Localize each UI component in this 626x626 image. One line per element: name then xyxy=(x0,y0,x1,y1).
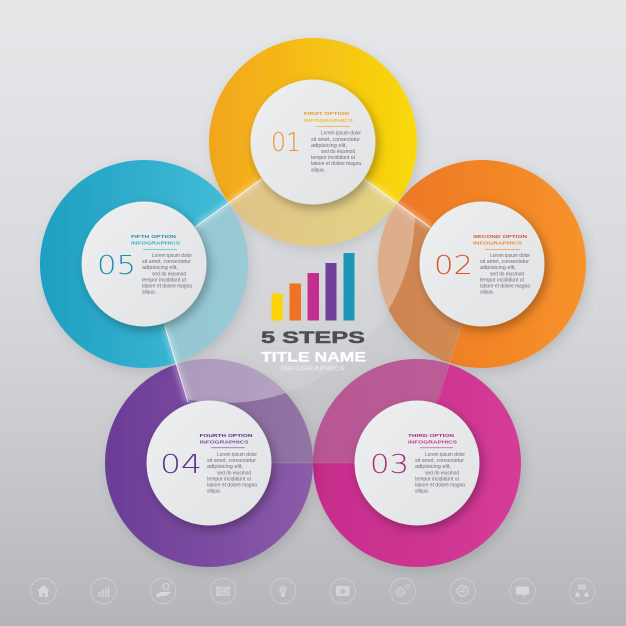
text block: second option: INFOGRAPHICS xyxy=(473,240,522,246)
text block: fourth option: 04 xyxy=(160,450,202,480)
inner disc: second option xyxy=(420,202,544,326)
glowing edge lines xyxy=(165,179,461,463)
inner disc: third option xyxy=(354,400,480,526)
icon: hand with coin xyxy=(150,578,176,604)
text block: second option: 02 xyxy=(434,251,473,281)
text block: third option: adipisicing elit, xyxy=(415,464,451,470)
text block: fourth option: adipisicing elit, xyxy=(207,464,243,470)
center title: TITLE NAME xyxy=(261,350,366,364)
text block: fourth option: INFOGRAPHICS xyxy=(200,439,248,444)
text block: third option: sed do eiusmod xyxy=(425,470,459,476)
icon: network xyxy=(569,578,595,604)
icon: clock xyxy=(450,578,476,604)
inner disc: fourth option xyxy=(146,400,272,526)
center title xyxy=(261,328,366,372)
icon: home xyxy=(31,578,56,604)
text block: second option: sed do eiusmod xyxy=(490,271,524,277)
text block: fifth option: FIFTH OPTION xyxy=(131,234,177,239)
ring: fourth option xyxy=(105,359,313,567)
text block: third option: tempor incididunt ut xyxy=(415,476,460,482)
text block: first option: adipisicing elit, xyxy=(311,143,347,149)
text block: first option: sit amet, consectetur xyxy=(311,137,360,143)
text block: fifth option: adipisicing elit, xyxy=(142,265,178,271)
text block: third option: THIRD OPTION xyxy=(408,433,455,438)
text block: first option: INFOGRAPHICS xyxy=(304,118,353,123)
text block: first option: labore et dolore magna xyxy=(311,161,361,167)
text block: first option: sed do eiusmod xyxy=(321,149,355,155)
ring: third option xyxy=(313,359,521,567)
icon: speech bubble xyxy=(510,578,535,604)
text block: second option: Lorem ipsum dolor xyxy=(490,253,530,259)
text block: first option xyxy=(271,111,361,173)
text block: first option: tempor incididunt ut xyxy=(311,155,356,161)
text block: third option: aliqua. xyxy=(415,489,429,495)
text block: fourth option: aliqua. xyxy=(207,489,221,495)
inner disc: first option xyxy=(250,80,376,204)
text block: fourth option: tempor incididunt ut xyxy=(207,476,252,482)
center title: 5 STEPS xyxy=(261,328,365,347)
icon: gears xyxy=(390,578,416,604)
text block: third option: 03 xyxy=(370,450,409,480)
text block: fifth option: sit amet, consectetur xyxy=(142,259,191,265)
text block: second option: SECOND OPTION xyxy=(473,234,528,239)
icon: light bulb xyxy=(270,578,296,604)
text block: first option: Lorem ipsum dolor xyxy=(321,131,361,137)
text block: third option: Lorem ipsum dolor xyxy=(425,452,465,458)
icon: chart xyxy=(91,578,116,604)
glass pentagon overlay xyxy=(164,178,462,463)
inner disc: fifth option xyxy=(82,202,206,326)
text block: first option: FIRST OPTION xyxy=(304,111,350,116)
text block: second option xyxy=(434,234,530,296)
text block: third option: sit amet, consectetur xyxy=(415,458,464,464)
icon: envelope xyxy=(210,578,236,604)
icon: camera xyxy=(330,578,356,604)
ring: fifth option xyxy=(40,160,248,368)
text block: second option: aliqua. xyxy=(480,290,494,296)
text block: fifth option: INFOGRAPHICS xyxy=(131,240,180,246)
text block: fifth option: aliqua. xyxy=(142,290,156,296)
text block: third option xyxy=(370,433,465,495)
text block: fourth option: sit amet, consectetur xyxy=(207,458,256,464)
text block: first option: 01 xyxy=(271,128,301,158)
text block: fourth option: Lorem ipsum dolor xyxy=(217,452,257,458)
text block: third option: INFOGRAPHICS xyxy=(408,439,457,444)
ring: first option xyxy=(209,38,417,246)
text block: fifth option: labore et dolore magna xyxy=(142,284,192,290)
text block: fifth option: 05 xyxy=(97,251,136,281)
text block: second option: sit amet, consectetur xyxy=(480,259,529,265)
text block: fourth option: FOURTH OPTION xyxy=(200,433,253,438)
text block: second option: labore et dolore magna xyxy=(480,284,530,290)
bar chart icon xyxy=(272,253,354,320)
text block: second option: adipisicing elit, xyxy=(480,265,516,271)
text block: fourth option: sed do eiusmod xyxy=(217,470,251,476)
ring: second option xyxy=(378,160,586,368)
text block: first option: aliqua. xyxy=(311,167,325,173)
text block: second option: tempor incididunt ut xyxy=(480,277,525,283)
text block: fourth option: labore et dolore magna xyxy=(207,482,257,488)
center title: INFOGRAPHICS xyxy=(281,366,346,372)
text block: fourth option xyxy=(160,433,257,495)
text block: third option: labore et dolore magna xyxy=(415,482,465,488)
text block: fifth option: Lorem ipsum dolor xyxy=(152,253,192,259)
text block: fifth option: tempor incididunt ut xyxy=(142,277,187,283)
text block: fifth option: sed do eiusmod xyxy=(152,271,186,277)
text block: fifth option xyxy=(97,234,192,296)
